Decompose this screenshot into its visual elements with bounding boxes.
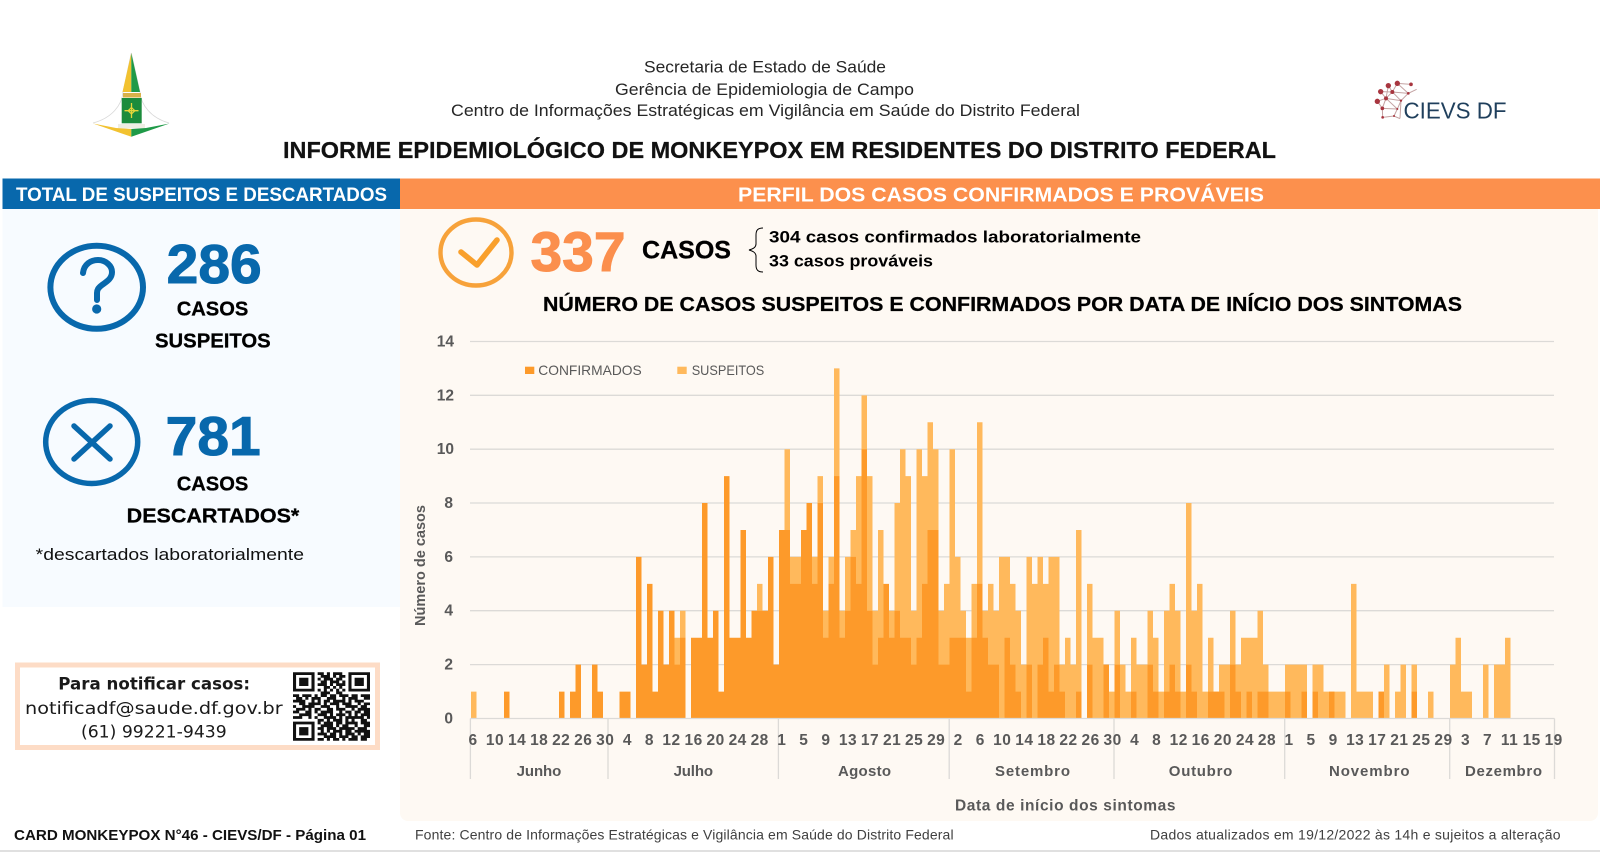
chart title: NÚMERO DE CASOS SUSPEITOS E CONFIRMADOS POR DATA DE INÍCIO DOS SINTOMAS (543, 292, 1462, 316)
brace (749, 228, 763, 272)
x axis day labels: 5 (799, 732, 808, 749)
footer: update note: Dados atualizados em 19/12/2022 às 14h e sujeitos a alteração (1150, 826, 1561, 842)
x axis day labels: 10 (993, 732, 1011, 749)
x axis day labels: 13 (839, 732, 857, 749)
logo: Distrito Federal coat of arms (93, 53, 170, 137)
header: institution names: Centro de Informações Estratégicas em Vigilância em Saúde do Distrito Federal (451, 102, 1080, 120)
QR code (293, 672, 370, 741)
panel: notificação de casos (18, 665, 378, 748)
x axis title: Data de início dos sintomas (955, 798, 1176, 815)
x axis day labels: 1 (1285, 732, 1294, 749)
x axis day labels: 24 (729, 732, 747, 749)
stat: 286 casos suspeitos (155, 233, 271, 352)
y axis title: Número de casos (412, 505, 429, 626)
x axis day labels: 8 (1152, 732, 1161, 749)
x axis day labels: 29 (927, 732, 945, 749)
bars: suspeitos (471, 368, 1510, 718)
header: institution names (451, 58, 1080, 120)
stat: 781 casos descartados: DESCARTADOS* (127, 505, 299, 528)
y axis labels: 2 (444, 657, 453, 674)
x axis month labels: Novembro (1329, 763, 1410, 780)
x axis day labels: 22 (1059, 732, 1078, 749)
x axis day labels: 1 (777, 732, 786, 749)
footer: card id: CARD MONKEYPOX N°46 - CIEVS/DF - Página 01 (14, 827, 366, 844)
x axis day labels: 24 (1236, 732, 1254, 749)
y axis labels: 0 (444, 710, 453, 728)
x axis day labels: 12 (662, 732, 681, 749)
x axis day labels: 28 (1258, 732, 1276, 749)
x axis day labels (468, 732, 1563, 749)
stat: 286 casos suspeitos: CASOS (177, 298, 248, 321)
x axis day labels: 4 (1130, 732, 1139, 749)
x axis month labels: Julho (674, 763, 713, 780)
x axis day labels: 14 (1015, 732, 1034, 749)
y axis labels: 4 (444, 603, 453, 620)
x axis day labels: 22 (552, 732, 570, 749)
heading: perfil dos casos: PERFIL DOS CASOS CONFIRMADOS E PROVÁVEIS (738, 184, 1264, 207)
x axis day labels: 2 (954, 732, 963, 749)
stat: 781 casos descartados: CASOS (177, 473, 248, 496)
bar chart: casos por data de início dos sintomas (412, 334, 1563, 815)
logo: CIEVS DF (1375, 81, 1506, 124)
x axis day labels: 20 (1214, 732, 1232, 749)
panel: perfil dos casos confirmados e prováveis (400, 178, 1600, 821)
x axis day labels: 19 (1545, 732, 1563, 749)
heading: total de suspeitos e descartados: TOTAL DE SUSPEITOS E DESCARTADOS (16, 184, 387, 206)
footer (0, 826, 1600, 852)
icon: check mark (440, 220, 512, 286)
y axis labels: 8 (444, 495, 453, 512)
x axis day labels: 8 (645, 732, 654, 749)
x axis day labels: 18 (1037, 732, 1056, 749)
x axis day labels: 11 (1501, 732, 1518, 749)
x axis month labels: Outubro (1169, 763, 1232, 780)
notification text (25, 674, 283, 742)
heading: perfil dos casos (400, 178, 1600, 209)
title: INFORME EPIDEMIOLÓGICO DE MONKEYPOX EM RESIDENTES DO DISTRITO FEDERAL (283, 136, 1276, 163)
x axis day labels: 5 (1307, 732, 1316, 749)
x axis day labels: 17 (1368, 732, 1386, 749)
x axis day labels: 12 (1170, 732, 1188, 749)
legend: SUSPEITOS (692, 362, 764, 378)
x axis day labels: 15 (1523, 732, 1541, 749)
y axis labels: 14 (437, 334, 454, 350)
y axis labels: 12 (437, 387, 454, 404)
x axis day labels: 13 (1346, 732, 1364, 749)
x axis day labels: 3 (1461, 732, 1470, 749)
header: institution names: Secretaria de Estado de Saúde (644, 58, 886, 76)
x axis day labels: 14 (508, 732, 526, 749)
stat: 286 casos suspeitos: 286 (167, 233, 262, 295)
x axis day labels: 30 (1103, 732, 1122, 749)
x axis day labels: 21 (883, 732, 901, 749)
x axis day labels: 10 (486, 732, 504, 749)
x axis day labels: 26 (574, 732, 592, 749)
x axis lines (470, 718, 1554, 779)
stat: 781 casos descartados (127, 405, 299, 528)
panel: total de suspeitos e descartados (2, 178, 400, 607)
stat: 781 casos descartados: 781 (166, 405, 261, 467)
notification text: Para notificar casos: (58, 674, 250, 694)
x axis day labels: 18 (530, 732, 548, 749)
x axis day labels: 26 (1081, 732, 1100, 749)
x axis day labels: 6 (976, 732, 985, 749)
stat: 337 casos (530, 220, 731, 283)
case breakdown (769, 228, 1141, 270)
x axis day labels: 29 (1434, 732, 1453, 749)
footnote: *descartados laboratorialmente (36, 545, 304, 564)
x axis day labels: 20 (706, 732, 725, 749)
x axis day labels: 7 (1483, 732, 1492, 749)
x axis day labels: 4 (623, 732, 632, 749)
heading: total de suspeitos e descartados (2, 178, 400, 209)
x axis day labels: 6 (468, 732, 478, 749)
x axis month labels: Agosto (838, 763, 891, 780)
x axis day labels: 17 (861, 732, 879, 749)
stat: 286 casos suspeitos: SUSPEITOS (155, 329, 271, 352)
legend (525, 362, 764, 378)
x axis day labels: 9 (821, 732, 830, 749)
bars: confirmados (504, 449, 1417, 718)
x axis month labels: Junho (517, 763, 561, 780)
footer: source: Fonte: Centro de Informações Estratégicas e Vigilância em Saúde do Distrito Federal (415, 826, 954, 842)
x axis month labels: Setembro (995, 763, 1070, 780)
notification text: (61) 99221-9439 (81, 722, 227, 742)
stat: 337 casos: 337 (530, 220, 626, 283)
x axis day labels: 21 (1390, 732, 1409, 749)
y axis labels: 6 (444, 549, 453, 566)
notification text: notificadf@saude.df.gov.br (25, 699, 283, 719)
x axis month labels: Dezembro (1465, 763, 1542, 780)
logo: CIEVS DF: CIEVS DF (1404, 98, 1506, 124)
y axis labels (437, 334, 454, 728)
header: institution names: Gerência de Epidemiologia de Campo (615, 81, 914, 99)
icon: question mark (50, 246, 143, 329)
x axis day labels: 16 (1192, 732, 1210, 749)
x axis month labels (517, 763, 1542, 780)
icon: cross (46, 400, 138, 484)
x axis day labels: 16 (684, 732, 703, 749)
x axis day labels: 9 (1329, 732, 1338, 749)
x axis day labels: 25 (1412, 732, 1431, 749)
x axis day labels: 25 (905, 732, 923, 749)
case breakdown: 33 casos prováveis (769, 251, 933, 270)
case breakdown: 304 casos confirmados laboratorialmente (769, 228, 1141, 247)
stat: 337 casos: CASOS (642, 236, 731, 264)
legend: CONFIRMADOS (538, 362, 642, 378)
x axis day labels: 28 (751, 732, 769, 749)
y axis labels: 10 (437, 441, 454, 458)
x axis day labels: 30 (596, 732, 614, 749)
